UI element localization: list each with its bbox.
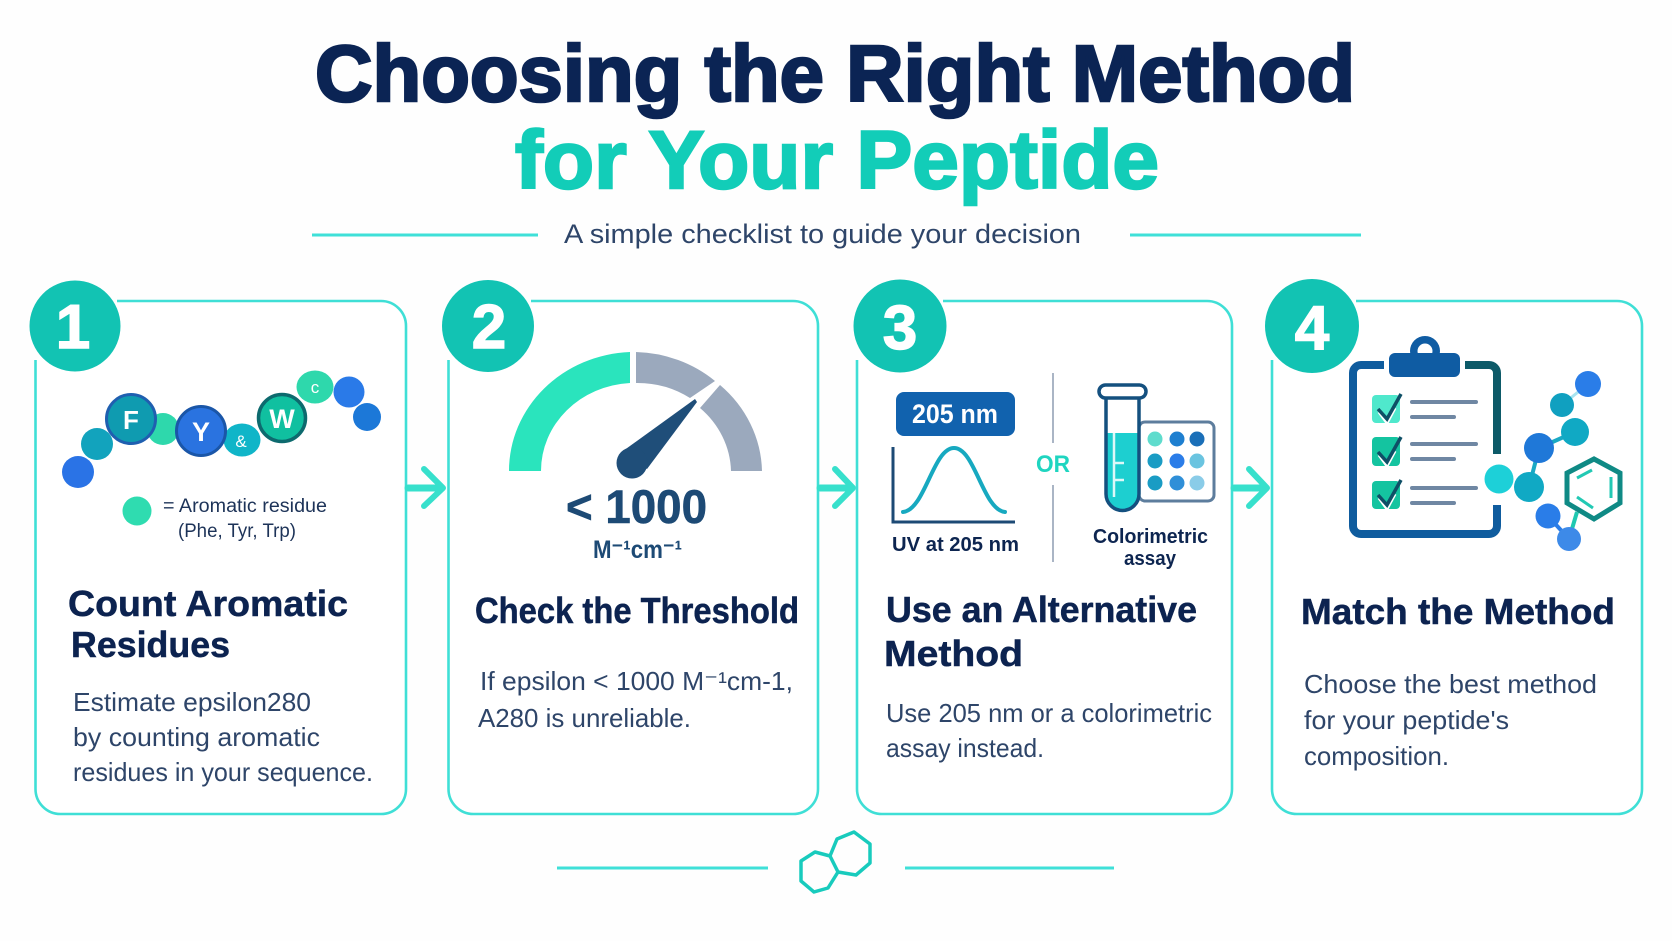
heading: Count Aromatic (68, 583, 348, 624)
footer ornament (557, 832, 1114, 892)
panel: step 1 count aromatic residues (30, 280, 406, 814)
icon: peptide chain: & (235, 432, 247, 451)
legend: aromatic residue: = Aromatic residue (163, 496, 327, 517)
arrow: step 2 to 3 (820, 469, 853, 506)
icon: fused hexagons (801, 832, 870, 892)
heading: Check the Threshold (475, 590, 799, 631)
icon: molecule (1484, 371, 1620, 551)
panel: step 3 use an alternative method (854, 280, 1232, 814)
chart: UV absorbance peak (893, 447, 1015, 522)
body text (73, 687, 373, 787)
step number 3: 3 (883, 294, 917, 363)
step number 2 (442, 280, 534, 372)
body text: by counting aromatic (73, 722, 320, 752)
or separator: OR (1036, 451, 1070, 478)
card outline (36, 301, 406, 814)
label: UV at 205 nm: UV at 205 nm (892, 534, 1019, 556)
step number 4: 4 (1295, 294, 1330, 363)
title line 2: for Your Peptide (515, 115, 1159, 206)
icon: peptide chain: c (311, 378, 320, 397)
heading (68, 583, 348, 665)
body text: composition. (1304, 741, 1449, 771)
step number 1 (30, 280, 120, 372)
card outline (448, 301, 818, 814)
icon: test tube and well plate (1099, 385, 1214, 510)
icon: clipboard checklist (1353, 336, 1497, 534)
step number 1: 1 (56, 293, 90, 362)
body text: residues in your sequence. (73, 757, 373, 787)
panel: step 2 check the threshold (442, 280, 818, 814)
legend: aromatic residue (122, 496, 327, 542)
panel: step 4 match the method (1265, 279, 1642, 814)
label: colorimetric assay: Colorimetric (1093, 526, 1208, 548)
heading: Match the Method (1301, 591, 1615, 632)
body text: If epsilon < 1000 M⁻¹cm-1, (480, 666, 793, 696)
step number 4 (1265, 279, 1359, 373)
legend: aromatic residue: (Phe, Tyr, Trp) (178, 521, 296, 542)
gauge (509, 352, 762, 478)
arrow: step 1 to 2 (408, 469, 443, 506)
heading (884, 589, 1197, 674)
title line 1: Choosing the Right Method (315, 29, 1355, 118)
card outline (1272, 301, 1642, 814)
icon: peptide chain (62, 370, 381, 488)
body text (886, 698, 1212, 763)
icon: peptide chain: F (123, 405, 139, 435)
body text (1304, 669, 1597, 771)
threshold value: < 1000 (566, 480, 707, 533)
heading: Use an Alternative (886, 589, 1197, 630)
body text: Use 205 nm or a colorimetric (886, 698, 1212, 728)
body text: for your peptide's (1304, 705, 1509, 735)
body text: Choose the best method (1304, 669, 1597, 699)
body text: assay instead. (886, 733, 1044, 763)
arrow: step 3 to 4 (1234, 469, 1267, 506)
body text: A280 is unreliable. (478, 703, 691, 733)
icon: peptide chain: W (269, 404, 295, 434)
step number 3 (854, 280, 946, 372)
title (315, 29, 1355, 206)
label: colorimetric assay: assay (1124, 548, 1177, 570)
step number 2: 2 (472, 293, 506, 362)
body text: Estimate epsilon280 (73, 687, 311, 717)
threshold unit: M⁻¹cm⁻¹ (593, 536, 682, 564)
body text (478, 666, 793, 733)
subtitle: A simple checklist to guide your decision (564, 219, 1081, 249)
heading: Residues (71, 624, 230, 665)
badge: 205 nm: 205 nm (912, 399, 998, 429)
card outline (857, 301, 1232, 814)
heading: Method (884, 633, 1023, 674)
label: colorimetric assay (1093, 526, 1208, 570)
badge: 205 nm (896, 392, 1015, 436)
icon: peptide chain: Y (192, 417, 210, 447)
